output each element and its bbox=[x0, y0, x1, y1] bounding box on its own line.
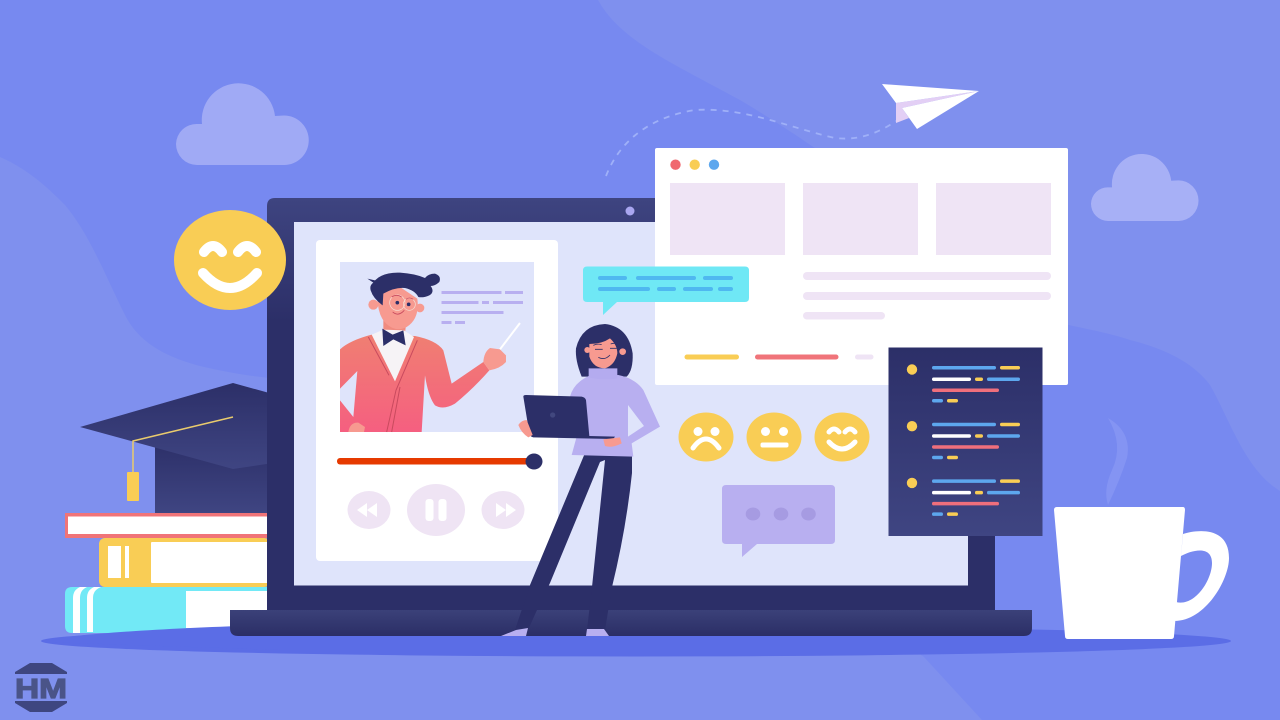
content tiles bbox=[670, 183, 1051, 255]
logo bbox=[15, 663, 67, 712]
tassel bbox=[127, 417, 233, 501]
neck bbox=[383, 319, 407, 334]
ground overlap on books bbox=[42, 625, 280, 650]
big smiley bbox=[174, 210, 286, 310]
teacher face bbox=[377, 287, 418, 329]
student legs bbox=[515, 453, 632, 630]
laptop frame bbox=[267, 198, 995, 610]
code panel bbox=[888, 348, 1042, 536]
laptop screen bbox=[294, 222, 968, 586]
emoji happy bbox=[814, 412, 870, 462]
yellow book bbox=[99, 538, 270, 587]
graduation cap bbox=[80, 383, 280, 513]
student sweater bbox=[570, 375, 660, 457]
dashed flight path bbox=[606, 110, 896, 176]
laptop camera bbox=[626, 206, 634, 216]
chat bubble lavender bbox=[722, 485, 835, 557]
teacher hand bbox=[483, 348, 506, 370]
text lines bbox=[803, 272, 1051, 320]
teacher bbox=[340, 273, 520, 432]
video player card bbox=[316, 240, 558, 561]
browser window bbox=[655, 148, 1068, 385]
pointer stick bbox=[500, 323, 520, 349]
teacher hair bbox=[367, 273, 440, 305]
emoji sad bbox=[678, 412, 734, 462]
paper plane bbox=[882, 84, 979, 129]
student upper body bbox=[518, 324, 660, 457]
cloud right bbox=[1091, 154, 1199, 221]
student shoes bbox=[501, 628, 609, 636]
shirt bbox=[372, 330, 414, 381]
student hair bbox=[576, 324, 633, 377]
cloud left bbox=[176, 83, 309, 165]
laptop base bbox=[230, 610, 1032, 636]
student face bbox=[584, 347, 590, 353]
window dots bbox=[670, 160, 719, 170]
emoji neutral bbox=[746, 412, 802, 462]
coffee mug bbox=[1054, 507, 1229, 639]
ground shadow bbox=[41, 626, 1231, 656]
player buttons bbox=[348, 484, 524, 536]
rewind button bbox=[348, 491, 390, 529]
video frame bbox=[340, 262, 534, 432]
red book bbox=[65, 513, 270, 538]
glasses and eyes bbox=[390, 295, 405, 310]
teacher coat bbox=[340, 335, 489, 432]
book stack bbox=[65, 513, 270, 633]
bow tie bbox=[382, 329, 406, 346]
logo: HM bbox=[15, 673, 67, 704]
chat bubble cyan bbox=[583, 266, 749, 315]
laptop bbox=[230, 198, 1032, 636]
slide text lines bbox=[442, 291, 523, 324]
student hands bbox=[518, 420, 622, 447]
status bars bbox=[684, 354, 874, 360]
student with laptop bbox=[501, 324, 660, 636]
student laptop bbox=[523, 395, 615, 439]
progress bar bbox=[337, 454, 542, 470]
cyan book bbox=[65, 587, 270, 633]
ears bbox=[368, 300, 378, 310]
pause button bbox=[407, 484, 465, 536]
coffee steam bbox=[1106, 418, 1128, 505]
forward button bbox=[482, 491, 524, 529]
